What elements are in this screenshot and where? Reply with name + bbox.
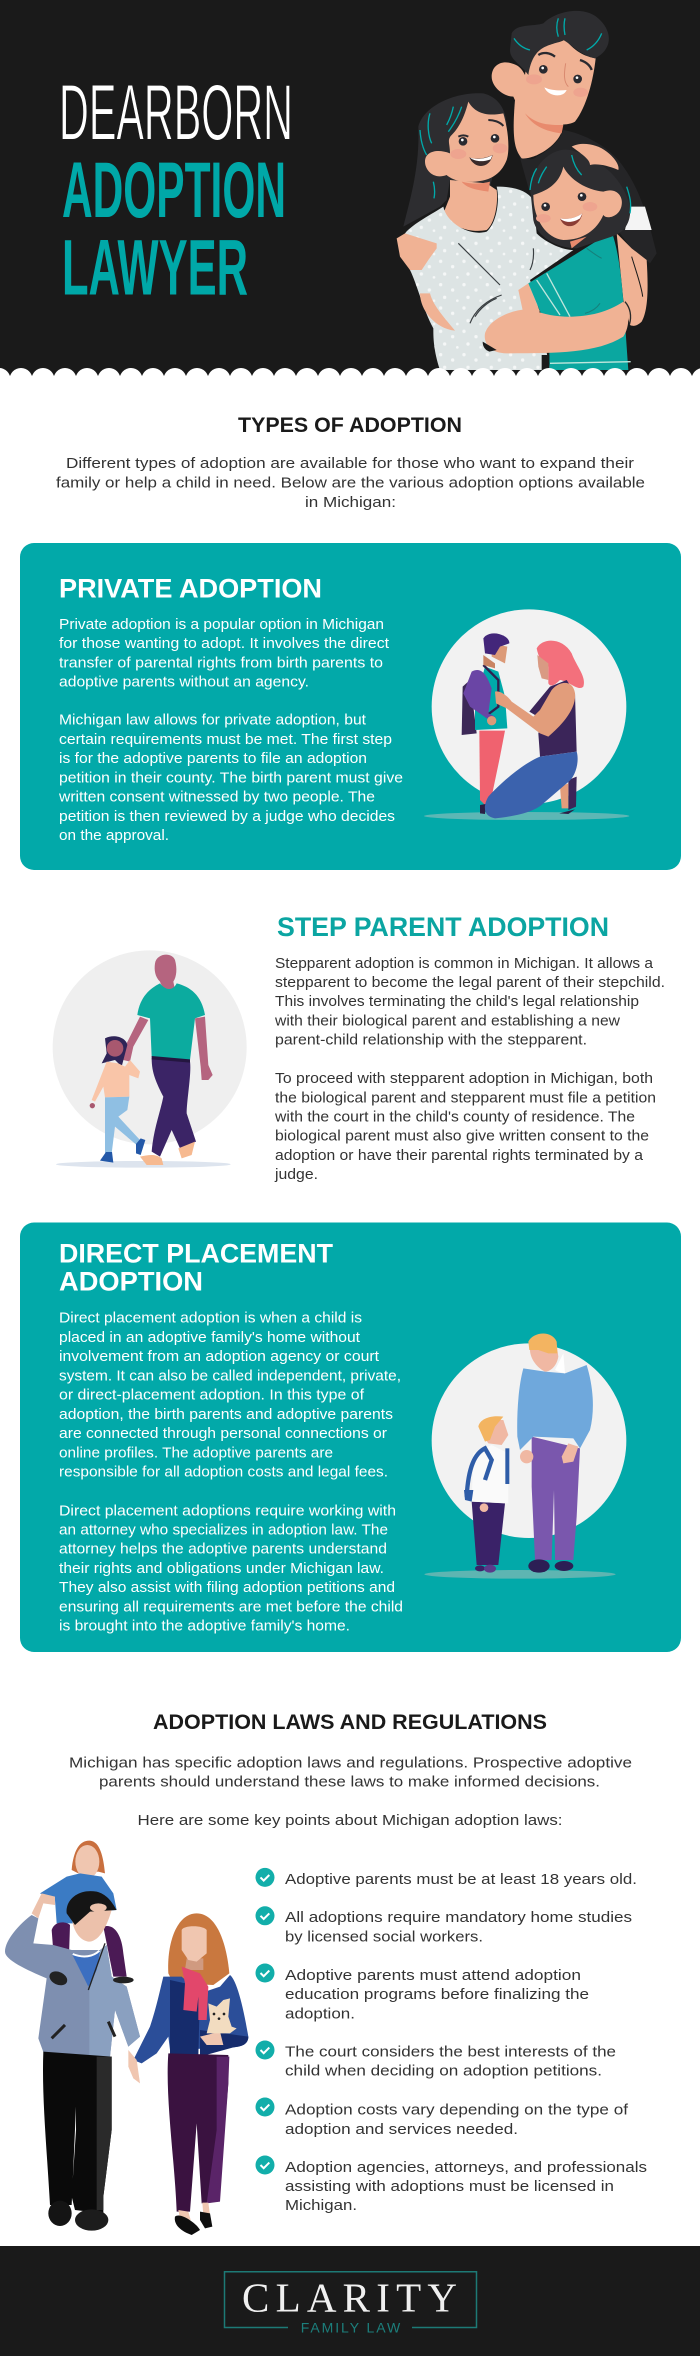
text: types intro (56, 455, 645, 511)
heading: direct placement adoption (59, 1239, 334, 1297)
text: private adoption body: transfer of parental rights from birth parents to (59, 654, 383, 671)
text: step parent body: To proceed with stepparent adoption in Michigan, both (275, 1070, 653, 1087)
text: direct placement body: online profiles. The adoptive parents are (59, 1444, 333, 1461)
title: DEARBORN (59, 68, 293, 156)
text: laws intro: Michigan has specific adoption laws and regulations. Prospective adoptive (69, 1754, 632, 1772)
text: step parent body: stepparent to become the legal parent of their stepchild. (275, 974, 665, 991)
panel: private adoption (20, 543, 681, 870)
list item 1 (256, 1868, 637, 1888)
title: ADOPTION (62, 146, 286, 234)
header panel (0, 0, 700, 391)
text: direct placement body: involvement from an adoption agency or court (59, 1348, 380, 1365)
text: step parent body: This involves terminating the child's legal relationship (275, 993, 639, 1010)
list item 6: Adoption agencies, attorneys, and professionals (285, 2159, 647, 2176)
list item 6: assisting with adoptions must be licensed in (285, 2178, 614, 2195)
list item 3: adoption. (285, 2005, 355, 2022)
heading: direct placement adoption: DIRECT PLACEMENT (59, 1239, 334, 1269)
list item 3: education programs before finalizing the (285, 1986, 589, 2003)
text: direct placement body: their rights and obligations under Michigan law. (59, 1560, 384, 1577)
footer (0, 2246, 700, 2356)
heading: direct placement adoption: ADOPTION (59, 1267, 203, 1297)
list item 6 (256, 2156, 647, 2214)
text: private adoption body: Private adoption is a popular option in Michigan (59, 616, 384, 633)
text: private adoption body: certain requirements must be met. The first step (59, 731, 392, 748)
text: step parent body: the biological parent and stepparent must file a petition (275, 1089, 656, 1106)
heading: step parent adoption: STEP PARENT ADOPTION (277, 912, 609, 942)
text: step parent body: with their biological parent and establishing a new (274, 1013, 620, 1030)
text: direct placement body: They also assist with filing adoption petitions and (59, 1579, 395, 1596)
text: step parent body: Stepparent adoption is common in Michigan. It allows a (275, 955, 654, 972)
text: direct placement body: or direct-placement adoption. In this type of (59, 1387, 365, 1404)
text: direct placement body: is brought into the adoptive family's home. (59, 1617, 350, 1634)
text: direct placement body: placed in an adoptive family's home without (59, 1329, 361, 1346)
text: laws intro (69, 1754, 632, 1829)
illustration: man and girl walking (53, 950, 247, 1168)
text: laws intro: Here are some key points about Michigan adoption laws: (138, 1812, 562, 1829)
checklist: adoption law key points (256, 1868, 647, 2214)
text: private adoption body: Michigan law allows for private adoption, but (59, 712, 367, 729)
heading: private adoption: PRIVATE ADOPTION (59, 574, 322, 604)
text: direct placement body: adoption, the birth parents and adoptive parents (59, 1406, 393, 1423)
text: direct placement body: attorney helps the adoptive parents understand (59, 1541, 387, 1558)
logo: clarity family law: FAMILY LAW (301, 2320, 401, 2336)
list item 3 (256, 1964, 589, 2022)
text: laws intro: parents should understand these laws to make informed decisions. (99, 1774, 600, 1790)
illustration: mother and boy (424, 609, 629, 820)
heading: adoption laws and regulations: ADOPTION LAWS AND REGULATIONS (153, 1711, 547, 1734)
text: direct placement body (59, 1310, 403, 1634)
text: step parent body (274, 955, 665, 1183)
list item 2 (256, 1906, 632, 1946)
text: step parent body: adoption or have their parental rights terminated by a (275, 1147, 644, 1164)
logo: clarity family law: CLARITY (242, 2275, 457, 2321)
text: direct placement body: Direct placement adoption is when a child is (59, 1310, 362, 1327)
logo: clarity family law (224, 2272, 476, 2336)
text: direct placement body: Direct placement adoptions require working with (59, 1502, 396, 1519)
text: private adoption body: is for the adoptive parents to file an adoption (59, 750, 367, 767)
text: private adoption body: petition in their county. The birth parent must give (59, 770, 403, 786)
list item 2: All adoptions require mandatory home studies (285, 1909, 632, 1926)
text: private adoption body: petition is then reviewed by a judge who decides (59, 808, 395, 825)
list item 4: child when deciding on adoption petitions. (285, 2063, 602, 2080)
heading: types of adoption: TYPES OF ADOPTION (238, 414, 462, 437)
illustration: hugging family (397, 11, 657, 370)
text: direct placement body: responsible for all adoption costs and legal fees. (59, 1464, 388, 1481)
list item 1: Adoptive parents must be at least 18 years old. (285, 1871, 637, 1888)
illustration: father and son (424, 1334, 626, 1579)
list item 5: Adoption costs vary depending on the type of (285, 2102, 629, 2118)
text: private adoption body (58, 616, 403, 844)
list item 4: The court considers the best interests of the (285, 2044, 616, 2061)
list item 5: adoption and services needed. (285, 2121, 518, 2138)
scalloped edge (0, 368, 700, 391)
list item 6: Michigan. (285, 2197, 357, 2214)
text: types intro: family or help a child in need. Below are the various adoption options available (56, 474, 645, 492)
text: private adoption body: on the approval. (59, 827, 169, 844)
text: private adoption body: adoptive parents without an agency. (59, 674, 309, 691)
text: direct placement body: system. It can also be called independent, private, (59, 1367, 401, 1384)
text: step parent body: parent-child relationship with the stepparent. (275, 1032, 587, 1049)
text: step parent body: judge. (274, 1166, 318, 1183)
text: private adoption body: written consent witnessed by two people. The (58, 789, 375, 806)
list item 3: Adoptive parents must attend adoption (285, 1967, 581, 1984)
text: step parent body: biological parent must also give written consent to the (275, 1128, 649, 1145)
list item 2: by licensed social workers. (285, 1928, 483, 1946)
text: types intro: Different types of adoption are available for those who want to expand their (66, 455, 634, 472)
text: direct placement body: an attorney who specializes in adoption law. The (59, 1521, 388, 1538)
panel: direct placement adoption (20, 1222, 681, 1652)
text: step parent body: with the court in the child's county of residence. The (274, 1108, 635, 1126)
list item 5 (256, 2098, 629, 2138)
title (59, 68, 293, 311)
text: private adoption body: for those wanting to adopt. It involves the direct (59, 635, 390, 652)
title: LAWYER (62, 223, 248, 311)
text: types intro: in Michigan: (305, 494, 396, 511)
illustration: family with dog (5, 1841, 248, 2235)
list item 4 (256, 2040, 616, 2080)
text: direct placement body: are connected through personal connections or (59, 1425, 387, 1442)
text: direct placement body: ensuring all requirements are met before the child (59, 1598, 403, 1615)
